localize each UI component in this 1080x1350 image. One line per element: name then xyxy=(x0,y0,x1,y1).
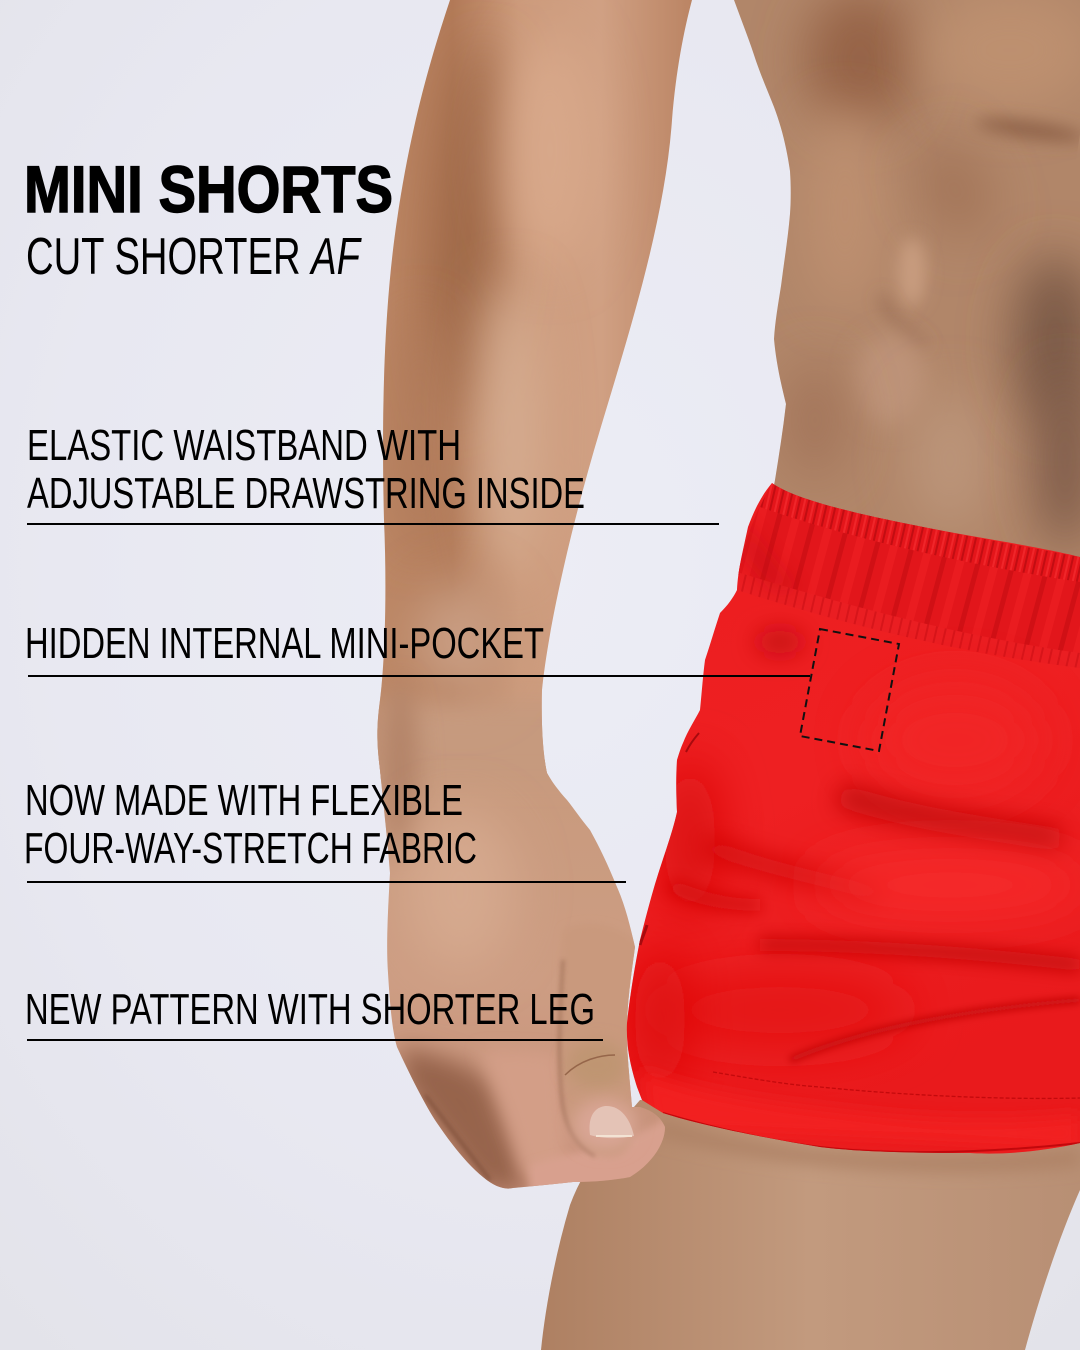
arm and hand xyxy=(370,0,700,1210)
red shorts xyxy=(620,480,1080,1160)
fingers xyxy=(486,1057,566,1180)
thumb xyxy=(603,937,635,1155)
callout: pattern: NEW PATTERN WITH SHORTER LEG xyxy=(25,985,595,1034)
callout: waistband: ADJUSTABLE DRAWSTRING INSIDE xyxy=(27,469,585,518)
leg xyxy=(541,1100,1080,1350)
callout: waistband xyxy=(27,421,719,525)
torso xyxy=(730,0,1080,580)
finger shadow xyxy=(400,1045,530,1190)
palm fold xyxy=(528,1120,665,1186)
waistband xyxy=(737,483,1080,668)
callout: pocket: HIDDEN INTERNAL MINI-POCKET xyxy=(25,619,544,668)
subtitle: CUT SHORTER AF xyxy=(26,228,362,286)
callout: waistband: ELASTIC WAISTBAND WITH xyxy=(27,421,461,470)
callout: fabric: FOUR-WAY-STRETCH FABRIC xyxy=(24,824,477,873)
callout: fabric: NOW MADE WITH FLEXIBLE xyxy=(25,776,463,825)
title: MINI SHORTS xyxy=(24,152,393,226)
pocket outline xyxy=(800,629,899,751)
callout: fabric xyxy=(24,776,626,883)
icon: thumbnail nail xyxy=(590,1106,634,1138)
fabric shading xyxy=(634,630,1080,1152)
